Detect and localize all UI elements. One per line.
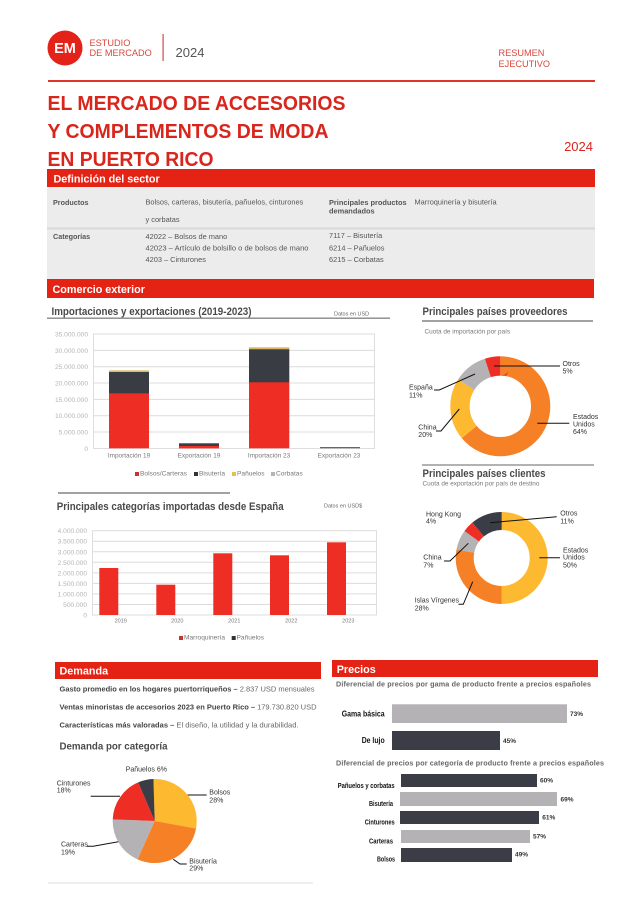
heading: importaciones y exportaciones: Datos en USD	[334, 312, 369, 318]
bar chart: categorías importadas desde España: 2019	[115, 619, 127, 625]
panel: definición del sector: Productos	[53, 198, 89, 207]
donut chart: clientes: Otros	[560, 510, 578, 518]
bar chart: categorías importadas desde España: 500.000	[63, 602, 87, 609]
heading: principales países proveedores: Principales países proveedores	[422, 306, 568, 318]
donut chart: clientes: 7%	[423, 562, 433, 570]
panel: definición del sector: y corbatas	[146, 215, 180, 224]
panel: definición del sector: 42022 – Bolsos de mano	[146, 232, 227, 241]
bar chart: diferencial por categoría: Pañuelos y corbatas	[338, 783, 395, 790]
header logo: DE MERCADO	[90, 48, 152, 58]
bar chart: importaciones y exportaciones: 10.000.000	[55, 413, 88, 420]
bar chart: diferencial por categoría: 61%	[542, 815, 556, 822]
pie chart: demanda por categoría	[57, 766, 231, 873]
pie chart: demanda por categoría: Bisutería	[189, 859, 217, 866]
section band: comercio exterior	[47, 279, 594, 298]
bar chart: diferencial por categoría: 49%	[515, 851, 528, 858]
bar chart: importaciones y exportaciones: 5.000.000	[59, 430, 88, 436]
heading: importaciones y exportaciones	[47, 306, 390, 319]
panel: demanda	[55, 662, 321, 753]
heading: principales países proveedores	[422, 306, 593, 336]
panel: demanda: Demanda por categoría	[60, 741, 168, 753]
bar chart: diferencial por gama: Diferencial de precios por gama de producto frente a precios españoles	[336, 680, 591, 689]
pie chart: demanda por categoría: Cinturones	[57, 781, 91, 788]
bar chart: importaciones y exportaciones: 0	[84, 446, 88, 453]
bar chart: diferencial por categoría: Carteras	[369, 838, 393, 845]
donut chart: proveedores: Otros	[562, 361, 580, 368]
bar chart: diferencial por gama: De lujo	[362, 735, 385, 745]
bar chart: categorías importadas desde España: 3.500.000	[58, 539, 87, 546]
bar chart: importaciones y exportaciones: Exportación 23	[318, 452, 361, 460]
donut chart: proveedores: 20%	[418, 432, 432, 439]
title: EN PUERTO RICO	[48, 149, 214, 171]
bar chart: importaciones y exportaciones: Importación 23	[248, 452, 291, 460]
bar chart: diferencial por categoría: Diferencial de precios por categoría de producto frente a precios españoles	[336, 759, 604, 768]
heading: importaciones y exportaciones: Importaciones y exportaciones (2019-2023)	[52, 306, 252, 318]
bar chart: importaciones y exportaciones: 35.000.000	[55, 332, 88, 338]
bar chart: categorías importadas desde España	[58, 528, 376, 642]
bar chart: diferencial por gama: 45%	[503, 738, 516, 745]
pie chart: demanda por categoría: Pañuelos 6%	[126, 766, 167, 774]
heading: principales países clientes	[422, 464, 594, 488]
bar chart: diferencial por gama: 73%	[570, 711, 583, 718]
heading: principales categorías importadas: Datos en USD$	[324, 504, 362, 510]
bar chart: categorías importadas desde España: 2022	[285, 619, 297, 625]
chart legend	[179, 635, 265, 642]
bar chart: diferencial por categoría: Bolsos	[377, 857, 395, 864]
donut chart: clientes: 4%	[426, 518, 436, 526]
chart legend: Bolsos/Carteras	[140, 470, 188, 478]
donut chart: clientes: Estados	[563, 548, 589, 555]
panel: definición del sector: demandados	[329, 206, 375, 216]
bar chart: categorías importadas desde España: 1.000.000	[58, 591, 87, 598]
heading: principales países clientes: Cuota de exportación por país de destino	[422, 480, 540, 488]
panel: definición del sector: Definición del sector	[54, 174, 160, 186]
year: 2024	[564, 139, 593, 154]
panel: definición del sector: 7117 – Bisutería	[329, 231, 383, 240]
bar chart: diferencial por categoría	[336, 759, 604, 864]
report type label: EJECUTIVO	[498, 59, 550, 69]
bar chart: importaciones y exportaciones: 20.000.000	[55, 380, 88, 388]
chart legend: Pañuelos	[237, 470, 265, 478]
donut chart: clientes: 50%	[563, 562, 577, 570]
panel: demanda: Demanda	[60, 666, 109, 678]
donut chart: proveedores: 5%	[562, 368, 573, 376]
panel: demanda: Gasto promedio en los hogares puertorriqueños – 2.837 USD mensuales	[60, 685, 315, 694]
panel: definición del sector: Marroquinería y bisutería	[414, 198, 498, 206]
section band: comercio exterior: Comercio exterior	[52, 284, 146, 296]
donut chart: proveedores: Estados	[573, 414, 599, 421]
panel: precios	[332, 660, 598, 677]
report type label	[498, 48, 550, 69]
chart legend: Corbatas	[276, 470, 303, 478]
bar chart: importaciones y exportaciones: 25.000.000	[55, 364, 88, 371]
bar chart: diferencial por gama	[336, 680, 591, 750]
bar chart: categorías importadas desde España: 2021	[228, 619, 240, 625]
donut chart: proveedores	[409, 361, 599, 447]
donut chart: clientes: 11%	[560, 518, 574, 526]
header logo: EM	[54, 41, 76, 57]
pie chart: demanda por categoría: Bolsos	[209, 790, 231, 797]
panel: definición del sector: 6215 – Corbatas	[329, 255, 384, 264]
title	[48, 93, 346, 171]
panel: demanda: Ventas minoristas de accesorios 2023 en Puerto Rico – 179.730.820 USD	[60, 703, 317, 712]
bar chart: categorías importadas desde España: 2020	[171, 619, 183, 625]
header logo: ESTUDIO	[90, 38, 130, 48]
bar chart: importaciones y exportaciones: 15.000.000	[55, 397, 88, 404]
panel: demanda: Características más valoradas – El diseño, la utilidad y la durabilidad.	[60, 721, 298, 730]
pie chart: demanda por categoría: 28%	[209, 798, 223, 804]
donut chart: proveedores: 64%	[573, 429, 587, 436]
title: Y COMPLEMENTOS DE MODA	[48, 121, 328, 143]
donut chart: clientes: Unidos	[563, 554, 585, 562]
bar chart: diferencial por gama: Gama básica	[342, 708, 385, 718]
donut chart: clientes: Hong Kong	[426, 512, 461, 518]
bar chart: categorías importadas desde España: 4.000.000	[58, 528, 87, 535]
panel: definición del sector: Categorías	[53, 232, 90, 241]
donut chart: clientes: 28%	[415, 606, 429, 612]
panel: definición del sector: Bolsos, carteras, bisutería, pañuelos, cinturones	[146, 198, 304, 206]
panel: definición del sector: 4203 – Cinturones	[146, 255, 206, 264]
chart legend	[135, 470, 303, 478]
header logo: 2024	[176, 45, 204, 60]
bar chart: diferencial por categoría: 60%	[540, 778, 553, 785]
report type label: RESUMEN	[498, 48, 544, 58]
donut chart: proveedores: Unidos	[573, 422, 595, 428]
heading: principales países proveedores: Cuota de importación por país	[424, 329, 510, 336]
donut chart: proveedores: China	[418, 424, 437, 432]
bar chart: importaciones y exportaciones: Exportación 19	[178, 452, 221, 460]
bar chart: categorías importadas desde España: 2.000.000	[58, 570, 87, 577]
chart legend: Bisutería	[199, 470, 225, 478]
donut chart: clientes	[415, 510, 589, 612]
bar chart: diferencial por categoría: 69%	[560, 797, 574, 804]
bar chart: diferencial por categoría: Bisutería	[369, 801, 393, 808]
bar chart: categorías importadas desde España: 2.500.000	[58, 560, 87, 567]
heading: principales categorías importadas: Principales categorías importadas desde España	[57, 501, 284, 513]
pie chart: demanda por categoría: 19%	[61, 850, 75, 856]
panel: definición del sector	[47, 169, 595, 279]
donut chart: proveedores: España	[409, 384, 433, 392]
chart legend: Marroquinería	[184, 635, 225, 642]
heading: principales categorías importadas	[57, 492, 362, 513]
panel: definición del sector: 42023 – Artículo de bolsillo o de bolsos de mano	[146, 244, 308, 252]
bar chart: diferencial por categoría: Cinturones	[365, 820, 395, 827]
header logo	[48, 30, 204, 66]
bar chart: importaciones y exportaciones	[55, 332, 374, 478]
bar chart: importaciones y exportaciones: 30.000.000	[55, 348, 88, 355]
pie chart: demanda por categoría: 18%	[57, 788, 71, 794]
panel: definición del sector: 6214 – Pañuelos	[329, 244, 385, 252]
pie chart: demanda por categoría: 29%	[189, 866, 203, 873]
donut chart: clientes: Islas Vírgenes	[415, 598, 460, 605]
panel: precios: Precios	[337, 664, 376, 676]
bar chart: importaciones y exportaciones: Importación 19	[108, 452, 151, 460]
bar chart: diferencial por categoría: 57%	[533, 833, 546, 840]
chart legend: Pañuelos	[236, 635, 265, 642]
bar chart: categorías importadas desde España: 0	[83, 612, 87, 620]
panel: definición del sector: Principales productos	[329, 198, 407, 207]
bar chart: categorías importadas desde España: 2023	[342, 619, 354, 625]
bar chart: categorías importadas desde España: 3.000.000	[58, 549, 87, 556]
title: EL MERCADO DE ACCESORIOS	[48, 93, 346, 115]
donut chart: clientes: China	[423, 555, 442, 562]
pie chart: demanda por categoría: Carteras	[61, 842, 88, 848]
bar chart: categorías importadas desde España: 1.500.000	[58, 581, 87, 588]
donut chart: proveedores: 11%	[409, 392, 422, 400]
heading: principales países clientes: Principales países clientes	[422, 468, 546, 480]
